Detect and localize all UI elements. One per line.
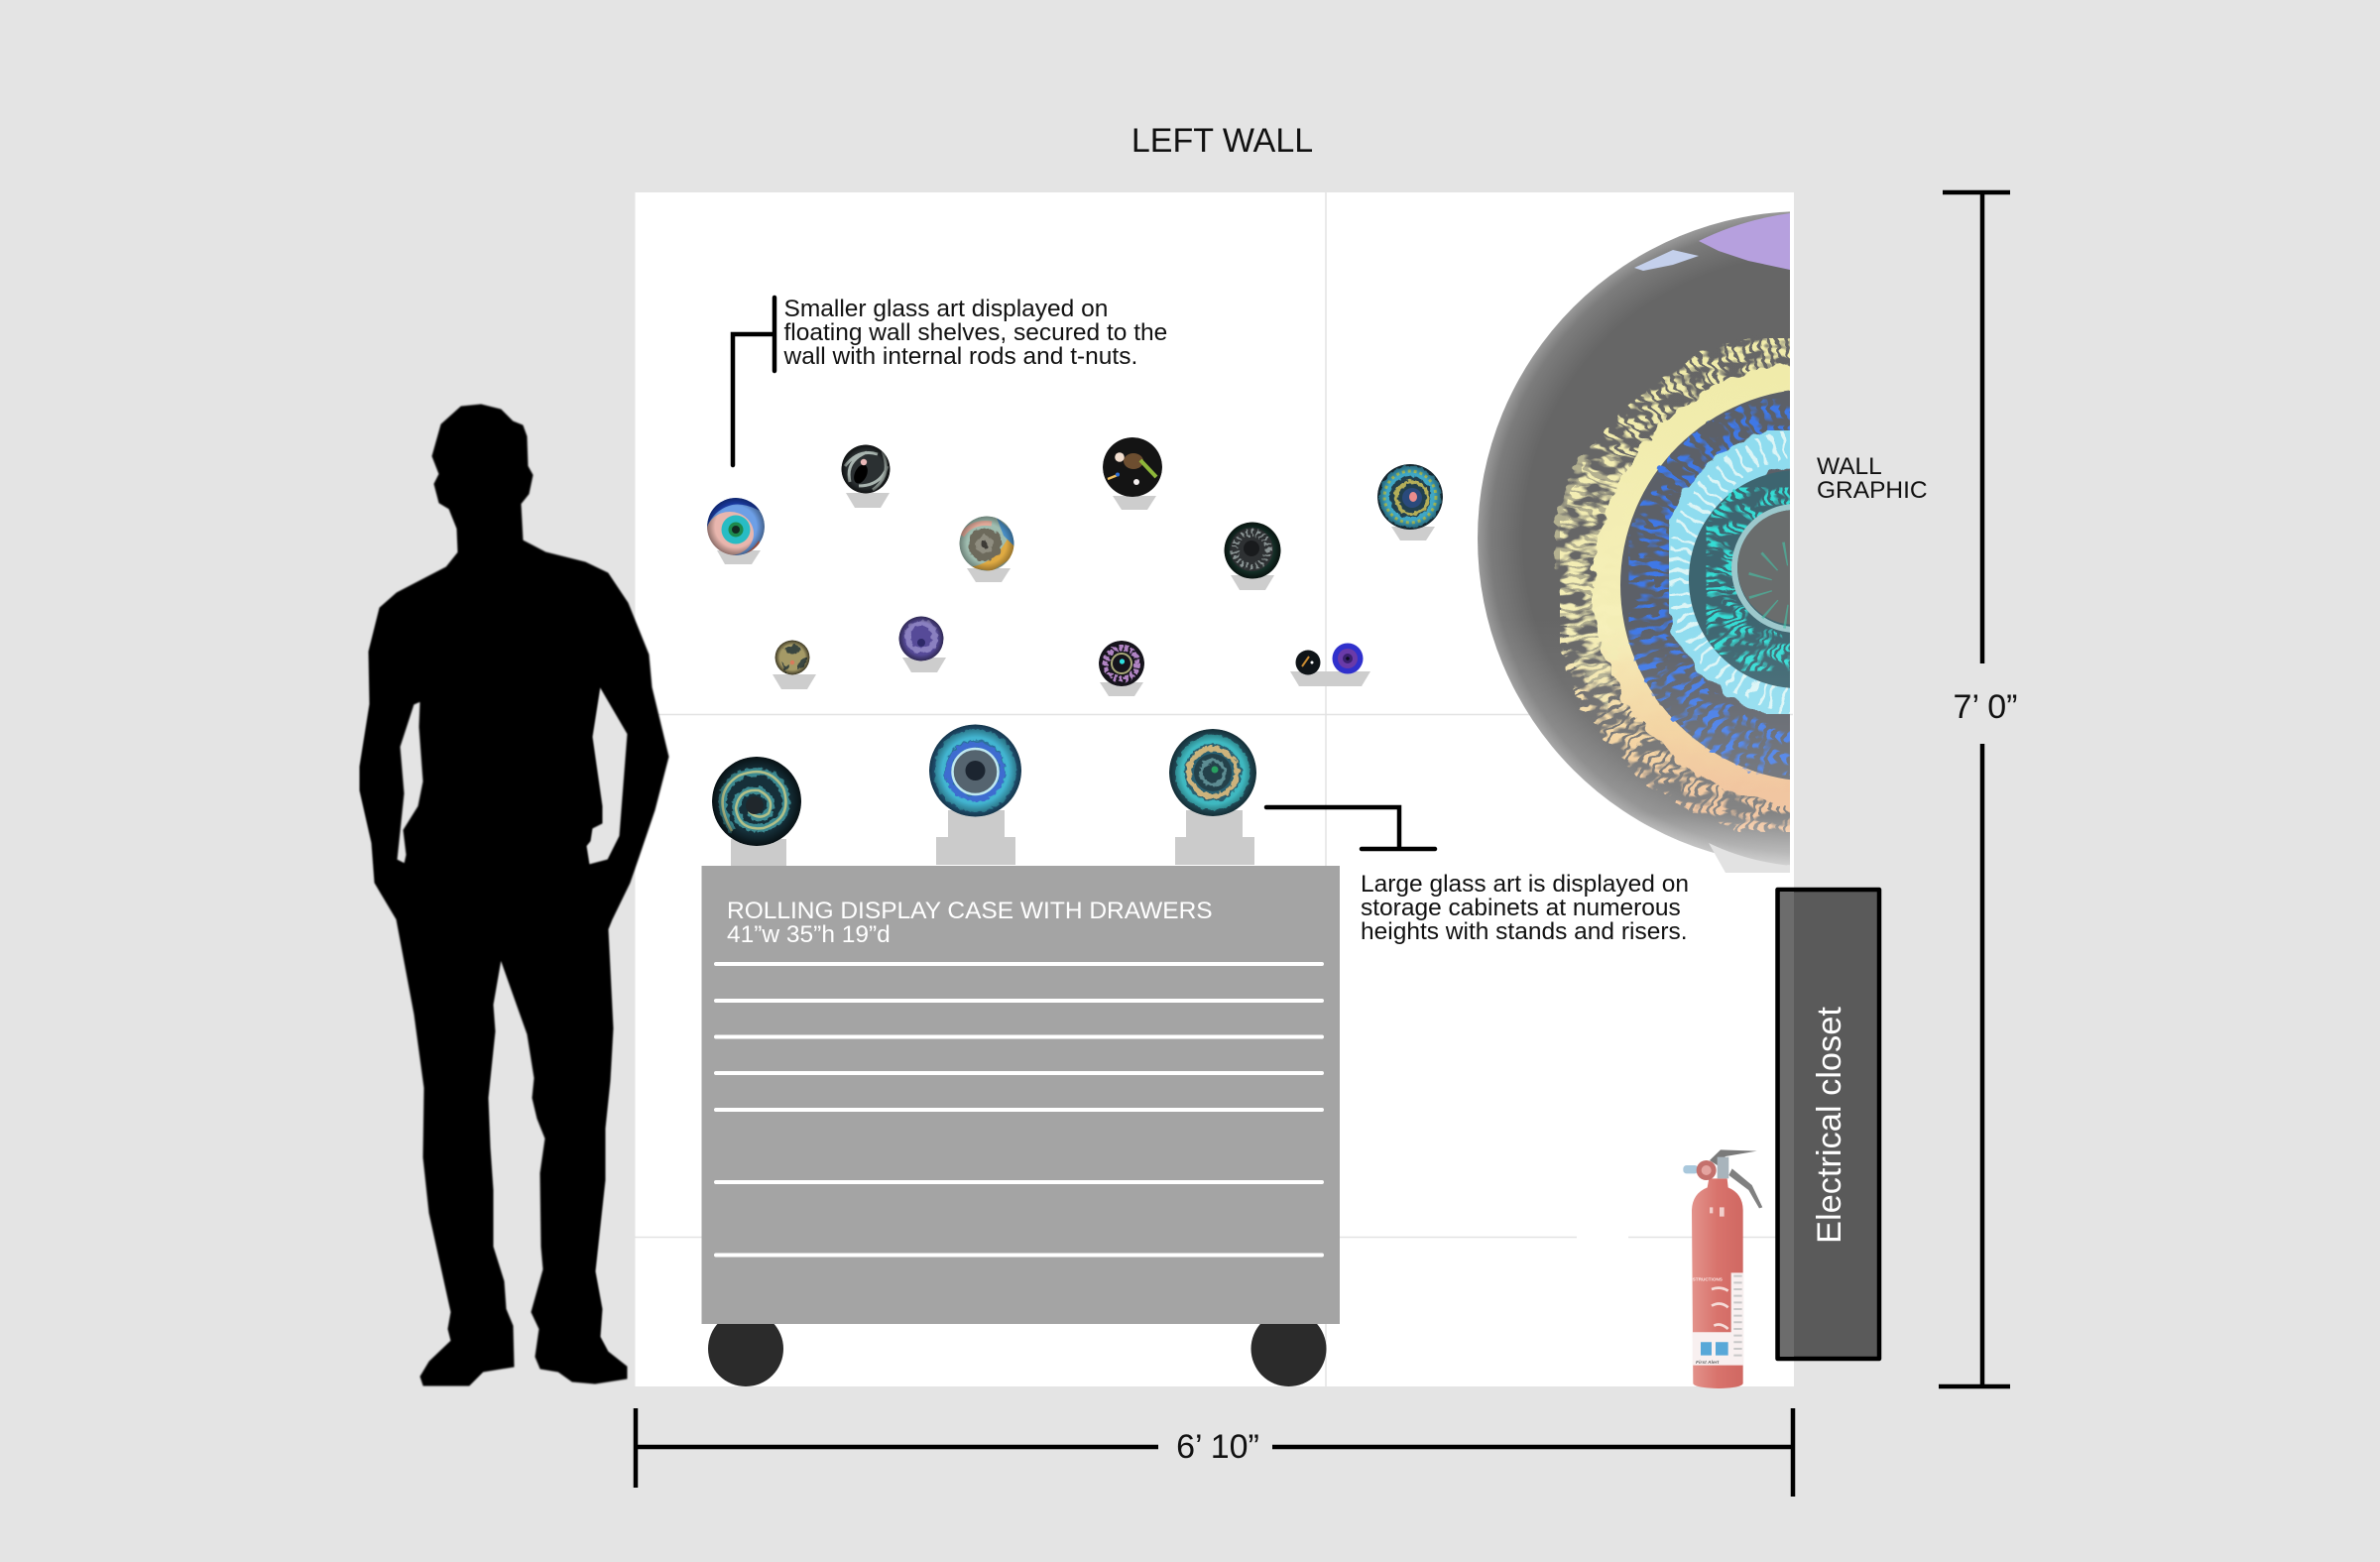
glass: dark green speckled marble [1224, 522, 1281, 579]
closet label: Electrical closet [1811, 1007, 1848, 1244]
glass: black cosmos marble [1103, 437, 1162, 497]
leader line: smaller glass art [733, 298, 774, 465]
glass: purple marble [898, 617, 944, 661]
label: wall graphic: WALL [1817, 453, 1882, 480]
panel: left wall [635, 192, 1794, 1386]
rolling display case [702, 866, 1340, 1324]
text: smaller glass art note: floating wall shelves, secured to the [783, 319, 1167, 346]
glass: tan mottled marble [775, 641, 809, 674]
cabinet label: 41”w 35”h 19”d [727, 921, 891, 948]
glass: teal spiral marble [1377, 464, 1443, 530]
text: large glass art note: Large glass art is displayed on [1361, 871, 1689, 898]
dimension: width [636, 1408, 1793, 1497]
glass: cobalt marble [1333, 643, 1363, 674]
electrical closet [1777, 890, 1879, 1359]
fire extinguisher [1683, 1149, 1762, 1388]
title: LEFT WALL [1131, 122, 1313, 160]
floating wall shelves [717, 493, 1435, 696]
text: smaller glass art note: wall with internal rods and t-nuts. [783, 343, 1137, 370]
fire extinguisher: First Alert [1696, 1360, 1720, 1366]
glass: large iridescent sphere [1169, 729, 1256, 816]
glass: tiny black marble [1295, 651, 1321, 674]
cabinet label: ROLLING DISPLAY CASE WITH DRAWERS [727, 898, 1213, 924]
silhouette: standing person [360, 405, 668, 1385]
glass: dark swirl marble [841, 444, 891, 494]
wheels [708, 1311, 1327, 1386]
glass: pink and violet marble [1099, 641, 1144, 686]
fire extinguisher: STRUCTIONS [1693, 1277, 1723, 1282]
text: large glass art note: storage cabinets at numerous [1361, 895, 1681, 921]
dimension: height [1939, 192, 2017, 1386]
label: wall graphic: GRAPHIC [1817, 477, 1928, 504]
text: smaller glass art note: Smaller glass art displayed on [783, 296, 1108, 322]
glass: teal eye marble [706, 498, 766, 557]
height value: 7’ 0” [1954, 688, 2017, 726]
glass: multicolour swirl marble [960, 516, 1015, 571]
wall graphic: large glass sphere [1478, 211, 1790, 873]
glass: large blue ring sphere [929, 724, 1021, 817]
width value: 6’ 10” [1176, 1428, 1259, 1466]
cabinet stands and risers [731, 810, 1254, 866]
glass: large dark spiral sphere [712, 757, 801, 846]
leader line: large glass art [1266, 807, 1435, 849]
text: large glass art note: heights with stands and risers. [1361, 918, 1688, 945]
